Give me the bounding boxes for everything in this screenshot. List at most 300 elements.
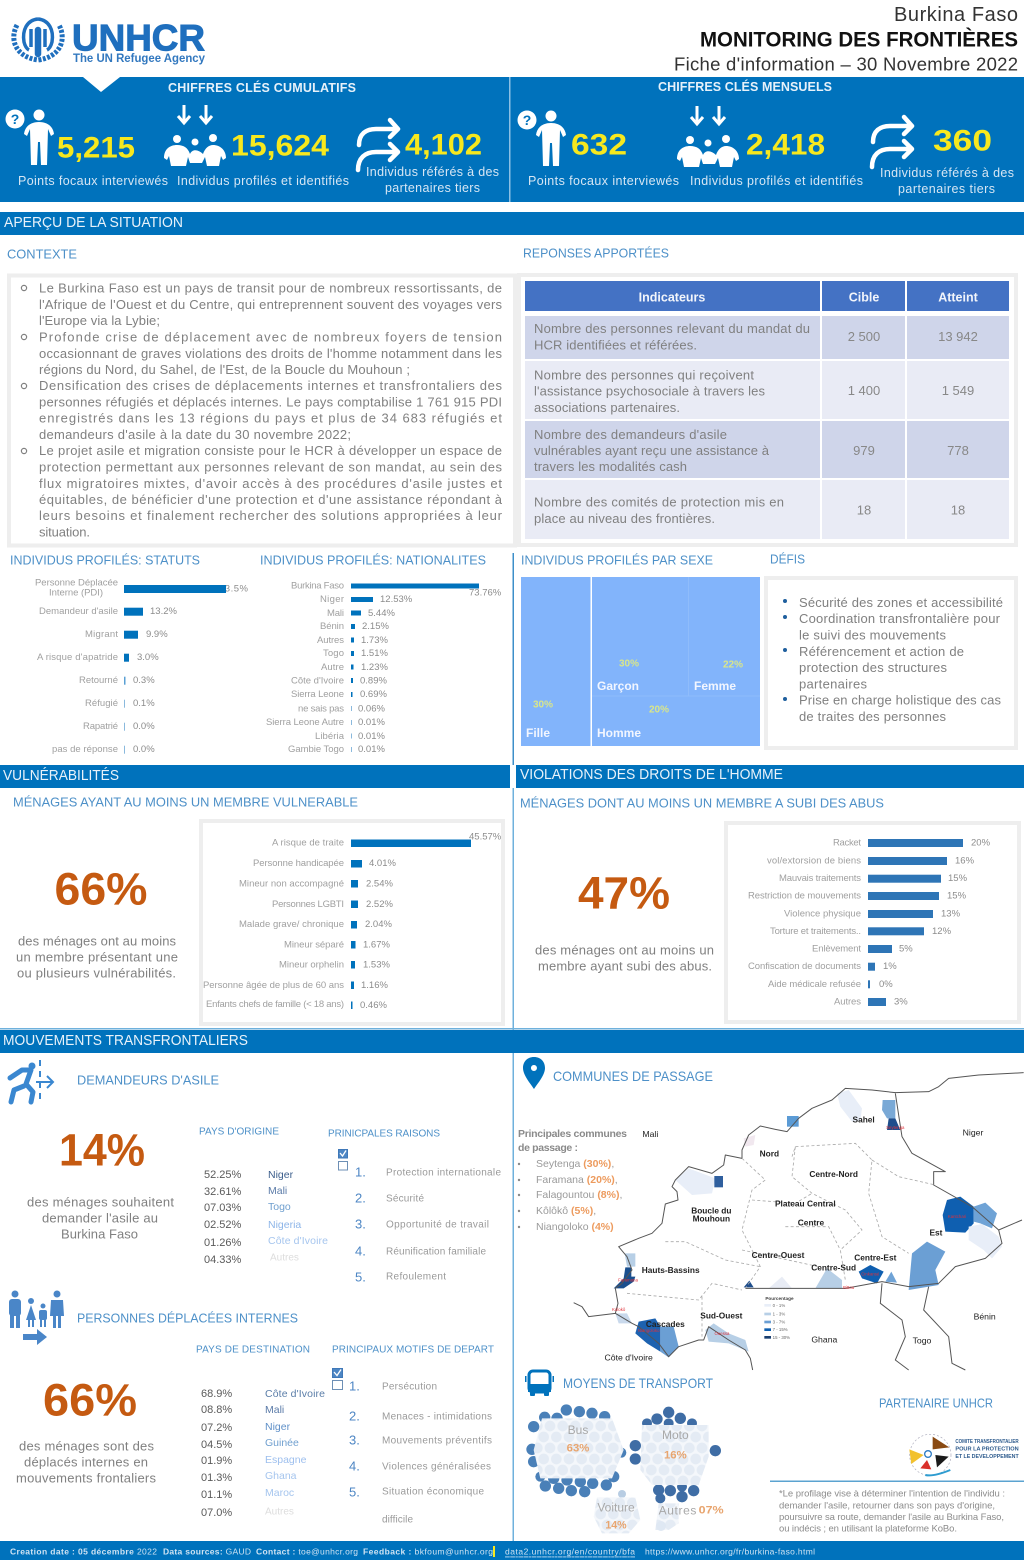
stat 4,102: 4,102 — [405, 128, 482, 162]
label individus: Individus profilés et identifiés — [177, 174, 349, 188]
table: pays de destination: Espagne — [265, 1454, 307, 1466]
chart: nationalités: 0.89% — [360, 676, 387, 686]
chart: statuts: 0.1% — [133, 698, 155, 709]
table: pays de destination: Autres — [265, 1506, 294, 1518]
label référés: Individus référés à des — [366, 165, 499, 179]
panel: défis: Référencement et action de — [799, 644, 964, 659]
row 2: l'assistance psychosociale à travers les — [534, 384, 766, 398]
heading: ménages vulnérables: MÉNAGES AYANT AU MOINS UN MEMBRE VULNERABLE — [13, 794, 358, 810]
panel: défis: Prise en charge holistique des cas — [799, 692, 1002, 708]
chart: statuts — [35, 578, 249, 755]
commune labels: Cinkansé — [861, 1271, 880, 1276]
heading: nationalités: INDIVIDUS PROFILÉS: NATIONALITES — [260, 552, 486, 568]
chart: statuts: 0.3% — [133, 675, 155, 686]
chart: abus: Restriction de mouvements — [748, 890, 861, 902]
map legend: Pourcentage — [765, 1296, 794, 1301]
heading: statuts: INDIVIDUS PROFILÉS: STATUTS — [10, 552, 200, 568]
chart: nationalités: Bénin — [320, 621, 344, 632]
chart: nationalités: Libéria — [315, 731, 345, 742]
panel: défis: partenaires — [799, 676, 868, 692]
vertical divider — [512, 788, 514, 1541]
text block: asile: demander l'asile au — [42, 1210, 158, 1226]
commune labels: Niangoloko — [638, 1328, 660, 1333]
bubble: voiture: Voiture — [597, 1500, 635, 1514]
chart: nationalités: Autre — [321, 662, 344, 673]
logo caption — [955, 1439, 1019, 1460]
region labels: Mouhoun — [693, 1213, 730, 1223]
list: principales raisons: 5. — [355, 1270, 366, 1284]
chart: statuts: pas de réponse — [52, 744, 118, 755]
icon: person with question — [6, 110, 54, 165]
chart: abus: Violence physique — [784, 908, 861, 920]
table: pays d'origine: 52.25% — [204, 1169, 242, 1181]
map legend: 3 - 7% — [773, 1319, 785, 1324]
heading: défis: DÉFIS — [770, 552, 805, 566]
panel: contexte: flux migratoires mixtes, d'avoir accès à des procédures d'asile justes et — [39, 476, 502, 491]
commune labels: Faramana — [618, 1277, 638, 1282]
table: pays d'origine: Côte d'Ivoire — [268, 1235, 328, 1247]
panel: défis: le suivi des mouvements — [799, 628, 946, 642]
icon: laurel wreath — [14, 19, 62, 60]
chart: vulnérabilités: Mineur non accompagné — [239, 878, 344, 890]
list: principales raisons — [328, 1128, 501, 1284]
chart: abus: 12% — [932, 926, 952, 937]
chart: nationalités: Burkina Faso — [291, 580, 344, 592]
commune labels: Kolokô — [612, 1307, 626, 1312]
list: motifs de départ: Mouvements préventifs — [382, 1436, 492, 1446]
chart: vulnérabilités: 2.54% — [366, 878, 393, 890]
region labels: Nord — [760, 1148, 779, 1158]
chart: vulnérabilités — [201, 821, 503, 1024]
region labels: Centre — [798, 1218, 825, 1228]
text block: principales communes: Kôlôkô (5%), — [536, 1205, 596, 1217]
list: principales raisons: 4. — [355, 1244, 366, 1258]
heading: personnes déplacées: PERSONNES DÉPLACÉES INTERNES — [77, 1310, 298, 1326]
chart: abus: 5% — [899, 944, 913, 954]
table header — [525, 281, 1009, 311]
chart: abus: 15% — [948, 873, 968, 884]
panel: contexte: Densification des crises de déplacements internes et transfrontaliers des — [39, 378, 503, 393]
icon: family arrows — [164, 105, 226, 166]
table: pays de destination: Côte d'Ivoire — [265, 1388, 325, 1400]
table: pays d'origine: PAYS D'ORIGINE — [199, 1126, 279, 1138]
chart: treemap sexe: Garçon — [597, 679, 639, 693]
map legend — [764, 1296, 794, 1340]
list: principales raisons: PRINICPALES RAISONS — [328, 1128, 440, 1140]
chart: abus: vol/extorsion de biens — [767, 856, 861, 866]
chart: nationalités: 0.01% — [358, 744, 385, 755]
list: motifs de départ: 2. — [349, 1408, 360, 1424]
chart: abus: Autres — [834, 996, 861, 1008]
bubble: bus — [526, 1404, 626, 1497]
icon: person with question: ? — [523, 112, 531, 128]
chart: abus: 13% — [941, 908, 961, 920]
table: pays d'origine: 32.61% — [204, 1186, 242, 1198]
region labels: Plateau Central — [775, 1198, 836, 1208]
heading: contexte: CONTEXTE — [7, 246, 77, 262]
map: Burkina Faso communes — [574, 1073, 1024, 1370]
text block: note: *Le profilage vise à déterminer l'intention de l'individu : — [779, 1488, 1005, 1500]
text block: déplacés: mouvements frontaliers — [16, 1470, 156, 1486]
chart: statuts: 73.5% — [219, 584, 249, 594]
chart: vulnérabilités: Personne handicapée — [253, 858, 344, 869]
stat 47%: 47% — [578, 868, 670, 918]
row 3 — [525, 421, 1009, 478]
stat 360: 360 — [933, 124, 992, 158]
table: pays de destination: Mali — [265, 1404, 284, 1416]
chart: vulnérabilités: 2.52% — [366, 899, 393, 910]
list: principales raisons: Sécurité — [386, 1194, 424, 1204]
panel: chiffres clés cumulatifs — [0, 77, 512, 202]
chart: nationalités — [266, 580, 502, 755]
chart: nationalités: 0.06% — [358, 704, 385, 714]
chart: nationalités: 1.51% — [361, 648, 388, 659]
table: pays d'origine: 07.03% — [204, 1202, 242, 1214]
row 1 — [525, 316, 1009, 359]
chart: vulnérabilités: 0.46% — [360, 1000, 387, 1011]
region labels: Centre-Est — [854, 1252, 897, 1262]
chart: statuts: Migrant — [85, 629, 118, 640]
stat 15,624: 15,624 — [231, 130, 329, 162]
text block: principales communes: Faramana (20%), — [536, 1174, 618, 1186]
list: motifs de départ — [332, 1344, 494, 1526]
row 4: Nombre des comités de protection mis en — [534, 494, 784, 510]
footer: Data sources: GAUD — [163, 1546, 251, 1556]
text block: note: demander l'asile, retourner dans son pays d'origine, — [779, 1500, 995, 1512]
panel: contexte: personnes réfugiés et déplacés internes. Le pays comptabilise 1 761 915 PDI — [39, 394, 502, 410]
title block: MONITORING DES FRONTIÈRES — [700, 28, 1018, 52]
label référés: Individus référés à des — [880, 166, 1014, 180]
chart: statuts: 9.9% — [146, 629, 168, 640]
chart: nationalités: 0.01% — [358, 731, 385, 742]
icon: bus — [525, 1371, 554, 1396]
logo caption: POUR LA PROTECTION — [955, 1446, 1019, 1452]
list: motifs de départ: difficile — [382, 1514, 413, 1526]
panel: contexte: l'Afrique de l'Ouest et du Centre, qui entreprennent souvent des voyages vers — [39, 297, 502, 312]
logo caption: ET LE DEVELOPPEMENT — [955, 1454, 1019, 1460]
text block: principales communes: de passage : — [518, 1142, 578, 1154]
chart: statuts: Personne Déplacée — [35, 578, 118, 588]
list: motifs de départ: Persécution — [382, 1382, 437, 1392]
list: principales raisons: Opportunité de travail — [386, 1220, 489, 1230]
section bar: aperçu de la situation: APERÇU DE LA SITUATION — [4, 215, 183, 231]
row 3: Nombre des demandeurs d'asile — [534, 427, 727, 442]
chart: nationalités: 5.44% — [368, 608, 395, 619]
region labels: Hauts-Bassins — [642, 1265, 700, 1275]
label référés: partenaires tiers — [385, 181, 480, 195]
row 3: 979 — [853, 443, 875, 458]
text block: principales communes: Falagountou (8%), — [536, 1189, 622, 1201]
region labels: Centre-Nord — [809, 1169, 858, 1179]
chart: abus — [726, 823, 1019, 1022]
text block: vulnérables: ou plusieurs vulnérabilités. — [17, 966, 176, 980]
chart: vulnérabilités: 1.67% — [363, 940, 390, 950]
bubble: voiture: 14% — [605, 1520, 627, 1532]
icon: redirect arrows — [872, 117, 912, 167]
chart: vulnérabilités: 2.04% — [365, 919, 392, 930]
row 3: vulnérables ayant reçu une assistance à — [534, 443, 770, 458]
list: principales raisons: Refoulement — [386, 1272, 446, 1282]
label points focaux: Points focaux interviewés — [18, 174, 168, 188]
section bar: vulnérabilités — [0, 765, 510, 788]
table: pays de destination: 07.0% — [201, 1507, 232, 1519]
label référés: partenaires tiers — [898, 182, 995, 196]
chart: abus: 1% — [883, 961, 897, 972]
chart: vulnérabilités: 1.53% — [363, 960, 390, 970]
heading: demandeurs d'asile: DEMANDEURS D'ASILE — [77, 1072, 219, 1088]
bubble: bus: Bus — [568, 1423, 588, 1437]
chart: treemap sexe: Fille — [526, 726, 550, 740]
note divider — [770, 1480, 1024, 1482]
icon: person with question — [518, 110, 566, 166]
partner logo — [909, 1434, 1019, 1476]
chart: nationalités: ne sais pas — [298, 704, 344, 714]
list: motifs de départ: 3. — [349, 1432, 360, 1448]
commune labels: Kantchari — [948, 1214, 966, 1219]
table: pays de destination: PAYS DE DESTINATION — [196, 1344, 310, 1356]
icon: demandeur d'asile — [10, 1060, 53, 1104]
table: pays de destination: 68.9% — [201, 1388, 232, 1400]
label référés — [880, 166, 1014, 196]
text block: abus: des ménages ont au moins un — [535, 942, 714, 958]
table: pays d'origine: 02.52% — [204, 1219, 242, 1231]
row 4 — [525, 480, 1009, 539]
text block: déplacés — [16, 1438, 156, 1486]
footer: Feedback : bkfoum@unhcr.org — [363, 1546, 493, 1556]
table: pays de destination: 07.2% — [201, 1422, 232, 1434]
panel: chiffres clés mensuels — [512, 77, 1024, 202]
table: pays d'origine: Togo — [268, 1201, 291, 1213]
label référés — [366, 165, 499, 195]
chart: statuts: 0.0% — [133, 744, 155, 755]
chart: abus: 15% — [947, 890, 967, 902]
list: principales raisons: 3. — [355, 1216, 366, 1232]
chart: vulnérabilités: 4.01% — [369, 858, 396, 869]
table header: Atteint — [938, 290, 979, 304]
chart: nationalités: 1.23% — [361, 662, 388, 673]
commune labels — [612, 1125, 966, 1336]
text block: déplacés: des ménages sont des — [19, 1438, 154, 1454]
bubble: autres: 07% — [699, 1505, 724, 1517]
panel: contexte: équitables, de bénéficier d'une protection et d'une assistance répondant à — [39, 492, 503, 507]
text block: abus — [535, 942, 714, 974]
country labels: Niger — [963, 1128, 983, 1138]
chart: statuts: Demandeur d'asile — [39, 606, 118, 617]
chart: nationalités: Côte d'Ivoire — [291, 676, 344, 686]
heading: ménages abus: MÉNAGES DONT AU MOINS UN MEMBRE A SUBI DES ABUS — [520, 796, 884, 810]
heading: moyens de transport: MOYENS DE TRANSPORT — [563, 1375, 713, 1391]
chart: treemap sexe: 30% — [619, 658, 639, 670]
table: pays de destination: 04.5% — [201, 1439, 232, 1451]
callout notch — [83, 77, 120, 92]
table: pays de destination: Niger — [265, 1421, 291, 1433]
bubble: moto: 16% — [664, 1450, 687, 1462]
table: pays de destination: Ghana — [265, 1470, 297, 1482]
table: pays d'origine: 01.26% — [204, 1237, 242, 1249]
heading: CHIFFRES CLÉS CUMULATIFS — [168, 80, 356, 95]
chart: vulnérabilités: Mineur séparé — [284, 940, 344, 950]
label points focaux: Points focaux interviewés — [528, 174, 679, 188]
chart: abus: 3% — [894, 996, 908, 1008]
map legend: 0 - 1% — [773, 1303, 785, 1308]
text block: principales communes: Niangoloko (4%) — [536, 1221, 614, 1233]
icon: family arrows — [677, 106, 739, 167]
text block: asile — [27, 1194, 174, 1242]
table: pays de destination: 01.3% — [201, 1472, 232, 1484]
list: principales raisons: Réunification familiale — [386, 1246, 486, 1258]
table: pays de destination: Maroc — [265, 1487, 294, 1499]
chart: abus: Confiscation de documents — [748, 961, 861, 972]
panel: contexte: Le Burkina Faso est un pays de transit pour de nombreux ressortissants, de — [39, 280, 502, 296]
text block: note: poursuivre sa route, demander l'asile au Burkina Faso, — [779, 1512, 1004, 1523]
panel: contexte: régions du Nord, du Sahel, de l'Est, de la Boucle du Mouhoun ; — [39, 362, 410, 377]
text block: note: ou indécis ; en utilisant la plateforme KoBo. — [779, 1524, 957, 1534]
heading: partenaire: PARTENAIRE UNHCR — [879, 1396, 993, 1410]
chart: nationalités: Mali — [327, 608, 344, 619]
panel: contexte: protection permettant aux personnes relevant de son mandat, au sein des — [39, 460, 502, 474]
bubble: moto: Moto — [662, 1428, 689, 1442]
chart: nationalités: Niger — [320, 594, 344, 605]
bubble: bus: 63% — [567, 1442, 589, 1454]
table: pays d'origine: Niger — [268, 1169, 294, 1181]
section bar: violations: VIOLATIONS DES DROITS DE L'HOMME — [520, 767, 783, 783]
panel: défis: Sécurité des zones et accessibilité — [799, 595, 1003, 610]
chart: vulnérabilités: Personne âgée de plus de 60 ans — [203, 980, 344, 991]
region labels: Boucle du — [691, 1206, 731, 1216]
chart: bubble transport — [526, 1404, 724, 1533]
panel: défis: de traites des personnes — [799, 709, 946, 724]
row 4: 18 — [951, 502, 965, 518]
row 3: travers les modalités cash — [534, 459, 687, 474]
panel: défis — [766, 578, 1016, 748]
text block: vulnérables: des ménages ont au moins — [18, 934, 176, 948]
wordmark: UNHCR — [72, 18, 205, 58]
heading: communes de passage: COMMUNES DE PASSAGE — [553, 1068, 713, 1084]
panel: contexte: occasionnant de graves violations des droits de l'homme notamment dans les — [39, 346, 502, 361]
row 1: HCR identifiées et référées. — [534, 338, 697, 352]
stat 5,215: 5,215 — [57, 132, 135, 164]
text block: asile: des ménages souhaitent — [27, 1194, 174, 1210]
region labels: Sahel — [853, 1114, 875, 1124]
chart: treemap sexe — [521, 577, 760, 746]
chart: vulnérabilités: 45.57% — [469, 832, 502, 842]
footer: Creation date : 05 décembre 2022 — [10, 1546, 157, 1556]
chart: statuts: Retourné — [79, 675, 118, 686]
row 1: 13 942 — [938, 329, 978, 344]
table header: Cible — [849, 290, 879, 304]
chart: nationalités: Sierra Leone — [291, 689, 344, 700]
chart: abus: Racket — [833, 838, 861, 848]
table: pays de destination: Guinée — [265, 1437, 299, 1449]
title block: Fiche d'information – 30 Novembre 2022 — [674, 54, 1018, 74]
chart: nationalités: Sierra Leone Autre — [266, 717, 344, 728]
logo wheel — [909, 1434, 951, 1476]
list: motifs de départ: Situation économique — [382, 1486, 484, 1498]
header logo UNHCR — [14, 18, 205, 65]
section bar: mouvements transfrontaliers — [0, 1028, 1024, 1053]
table: pays d'origine: Autres — [270, 1252, 299, 1264]
icon: redirect arrows — [358, 120, 398, 170]
map legend: 15 - 30% — [773, 1335, 790, 1340]
chart: nationalités: 0.01% — [358, 717, 385, 728]
text block: vulnérables — [16, 934, 178, 980]
row 1: Nombre des personnes relevant du mandat du — [534, 321, 810, 336]
chart: treemap sexe: Femme — [694, 679, 736, 693]
panel: contexte: Le projet asile et migration consiste pour le HCR à développer un espace de — [39, 443, 502, 458]
label individus: Individus profilés et identifiés — [690, 174, 863, 188]
list: motifs de départ: PRINCIPAUX MOTIFS DE DEPART — [332, 1344, 494, 1356]
region labels: Centre-Sud — [811, 1262, 856, 1272]
row 2: 1 400 — [848, 383, 880, 398]
chart: vulnérabilités: Personnes LGBTI — [272, 899, 344, 910]
stat 66%: 66% — [54, 864, 148, 914]
row 3: 778 — [947, 443, 969, 458]
chart: abus: 0% — [879, 979, 893, 990]
chart: treemap sexe: Homme — [597, 726, 641, 740]
country labels: Mali — [642, 1129, 658, 1139]
list: principales raisons: Protection internationale — [386, 1168, 501, 1178]
table: pays de destination — [196, 1344, 325, 1519]
bubble: voiture — [594, 1490, 640, 1533]
region labels: Est — [930, 1227, 943, 1237]
choropleth regions — [614, 1090, 1002, 1357]
chart: statuts: Rapatrié — [83, 721, 118, 732]
country labels: Ghana — [811, 1334, 838, 1344]
chart: nationalités: Togo — [323, 648, 344, 659]
panel: contexte: enregistrés dans les 13 régions du pays et plus de 34 683 réfugiés et — [39, 410, 502, 426]
chart: nationalités: Gambie Togo — [288, 744, 344, 755]
panel: contexte: situation. — [39, 524, 90, 540]
chart: vulnérabilités: Enfants chefs de famille (< 18 ans) — [206, 999, 344, 1010]
footer — [0, 1541, 1024, 1560]
list: principales raisons: 1. — [355, 1164, 366, 1180]
chart: nationalités: 1.73% — [361, 635, 388, 646]
region labels — [642, 1114, 943, 1329]
table: pays de destination: 01.9% — [201, 1455, 232, 1467]
stat 2,418: 2,418 — [746, 128, 825, 162]
chart: nationalités: 0.69% — [360, 689, 387, 700]
list: motifs de départ: 1. — [349, 1378, 360, 1394]
panel: contexte: leurs besoins et finalement rechercher des solutions appropriées à leur — [39, 508, 503, 523]
text block: note — [779, 1488, 1005, 1534]
panel: contexte: l'Europe via la Lybie; — [39, 313, 160, 328]
country labels: Togo — [913, 1336, 932, 1346]
table: pays d'origine: Mali — [268, 1185, 287, 1197]
chart: nationalités: 2.15% — [362, 621, 389, 632]
chart: statuts: 3.0% — [137, 652, 159, 663]
text block: vulnérables: un membre présentant une — [16, 950, 178, 964]
list: motifs de départ: 4. — [349, 1458, 360, 1474]
map legend: 7 - 15% — [773, 1327, 788, 1332]
section bar: vulnérabilités: VULNÉRABILITÉS — [3, 767, 119, 784]
list: motifs de départ: Menaces - intimidations — [382, 1412, 492, 1422]
chart: abus: Torture et traitements.. — [770, 926, 861, 937]
region labels: Cascades — [646, 1319, 685, 1329]
map legend: 1 - 3% — [773, 1311, 785, 1316]
list: principales raisons: 2. — [355, 1190, 366, 1206]
table header: Indicateurs — [639, 290, 705, 304]
chart: treemap sexe: 30% — [533, 700, 553, 710]
country labels: Bénin — [974, 1312, 996, 1322]
chart: statuts: Réfugié — [85, 698, 118, 709]
table: pays de destination: 08.8% — [201, 1404, 232, 1416]
chart: vulnérabilités: A risque de traite — [272, 838, 344, 848]
text block: abus: membre ayant subi des abus. — [538, 958, 712, 974]
chart: statuts: Interne (PDI) — [49, 588, 103, 598]
chart: nationalités: 73.76% — [469, 588, 502, 598]
chart: abus: 20% — [971, 838, 991, 848]
commune labels: Bittou — [843, 1285, 855, 1290]
